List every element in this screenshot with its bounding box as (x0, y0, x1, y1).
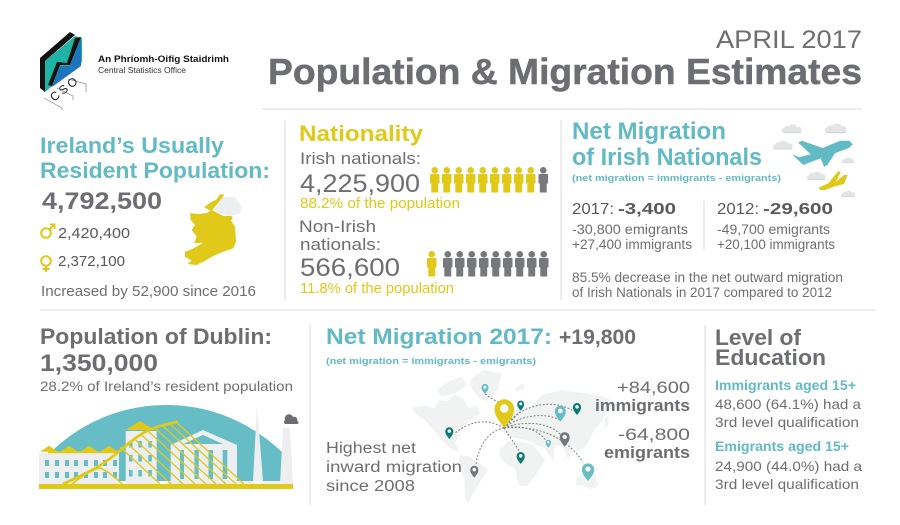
panel: level of education: Education (715, 345, 826, 370)
2012 figures: -29,600 (763, 201, 833, 218)
heading: net migration of Irish nationals: Net Migration (572, 118, 726, 145)
panel: Ireland's usually resident population (40, 133, 270, 300)
pins (445, 384, 594, 481)
immigrants education: Immigrants aged 15+ (715, 377, 856, 393)
2012 figures (717, 201, 835, 252)
note: decrease in net outward migration: 85.5% decrease in the net outward migration (572, 270, 843, 285)
heading: resident population: Ireland’s Usually (40, 133, 225, 158)
immigrants education: 3rd level qualification (715, 414, 859, 430)
panel: nationality: Non-Irish (299, 217, 376, 236)
panel: Ireland's usually resident population: 2,372,100 (58, 253, 125, 270)
immigrants figure: +84,600 (617, 378, 690, 397)
icon: large plane (792, 141, 853, 167)
panel: nationality: 11.8% of the population (300, 281, 454, 297)
panel: nationality: nationals: (300, 235, 381, 254)
caption: highest net inward migration: Highest net (326, 440, 417, 457)
heading: population of Dublin: Population of Dublin: (40, 324, 272, 349)
heading: level of education: Level of (715, 325, 802, 350)
map: world with migration routes (412, 370, 618, 503)
emigrants figure: -64,800 (618, 425, 690, 444)
population increase: Increased by 52,900 since 2016 (41, 284, 256, 300)
2012 figures: 2012: (717, 201, 759, 218)
panel: nationality: 88.2% of the population (300, 196, 460, 212)
panel: Ireland's usually resident population: 2,420,400 (58, 225, 130, 242)
logo: Central Statistics Office: CSO (47, 74, 80, 104)
2017 figures: +27,400 immigrants (572, 237, 692, 252)
panel: net migration 2017 (326, 324, 690, 503)
caption: highest net inward migration: since 2008 (326, 478, 415, 495)
bridge (63, 422, 244, 484)
2017 figures (572, 201, 692, 252)
icon: clouds (773, 124, 855, 197)
map: Ireland (185, 194, 242, 265)
panel: net migration 2017: +19,800 (559, 326, 636, 349)
illustration: Dublin skyline (39, 405, 298, 489)
Irish nationals figure: 4,225,900 (300, 170, 420, 198)
title: date: APRIL 2017 (716, 26, 862, 54)
panel: Ireland's usually resident population: Resident Population: (40, 158, 270, 183)
pictogram: Irish nationals (430, 167, 548, 192)
panel: population of Dublin: 1,350,000 (40, 350, 158, 377)
emigrants education (715, 438, 862, 492)
emigrants education: Emigrants aged 15+ (715, 438, 849, 454)
panel: net migration of Irish nationals: (net migration = immigrants - emigrants) (572, 173, 781, 184)
panel: population of Dublin: 28.2% of Ireland’s resident population (40, 378, 293, 394)
2017 figures: -30,800 emigrants (572, 222, 688, 237)
logo text: Irish name: An Phríomh-Oifig Staidrimh (98, 54, 229, 65)
note: decrease in net outward migration: of Irish Nationals in 2017 compared to 2012 (572, 285, 832, 300)
2017 figures: -3,400 (618, 201, 676, 218)
immigrants education: 48,600 (64.1%) had a (715, 396, 861, 412)
immigrants education (715, 377, 861, 430)
title: main heading: Population & Migration Estimates (268, 51, 862, 92)
panel: net migration of Irish nationals (572, 118, 855, 300)
emigrants figure: emigrants (604, 443, 690, 462)
pictogram: non-Irish nationals (427, 251, 548, 276)
heading: net migration 2017: Net Migration 2017: (326, 324, 552, 349)
panel: net migration of Irish nationals: of Irish Nationals (572, 144, 762, 171)
panel: net migration 2017: (net migration = immigrants - emigrants) (326, 356, 536, 367)
panel: level of education (715, 325, 862, 492)
non-Irish nationals figure: 566,600 (300, 254, 400, 282)
emigrants figure (604, 425, 690, 462)
panel: nationality: Irish nationals: (300, 149, 421, 168)
emigrants education: 24,900 (44.0%) had a (715, 458, 862, 474)
2017 figures: 2017: (572, 201, 614, 218)
emigrants education: 3rd level qualification (715, 476, 859, 492)
heading: nationality: Nationality (299, 121, 424, 146)
logo: Central Statistics Office: Central Statistics Office (98, 65, 186, 75)
total population: 4,792,500 (42, 188, 162, 215)
note: decrease in net outward migration (572, 270, 843, 300)
panel: population of Dublin (39, 324, 298, 489)
2012 figures: +20,100 immigrants (717, 237, 835, 252)
caption: highest net inward migration: inward migration (326, 459, 462, 476)
2012 figures: -49,700 emigrants (717, 222, 830, 237)
icon: male (41, 224, 54, 238)
logo: Central Statistics Office (40, 32, 229, 110)
caption: highest net inward migration (326, 440, 462, 495)
icon: female (41, 256, 51, 272)
panel: nationality (299, 121, 548, 297)
immigrants figure (595, 378, 690, 415)
icon: small plane (819, 171, 848, 190)
immigrants figure: immigrants (595, 396, 690, 415)
icon: cloud (284, 414, 298, 424)
